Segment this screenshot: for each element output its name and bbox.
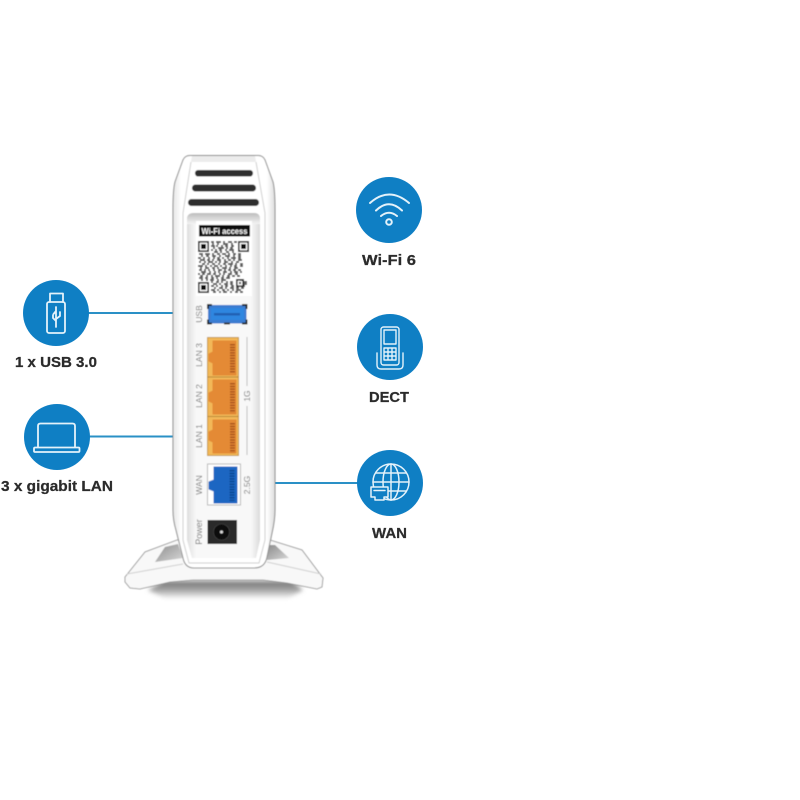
panel top shading [187, 213, 260, 224]
WAN port [208, 464, 240, 505]
LAN 1 jack [209, 420, 236, 453]
stand base [125, 540, 323, 589]
connector line: LAN [89, 436, 173, 438]
white sticker [196, 221, 252, 296]
connector line: USB [88, 312, 173, 314]
USB label: 1 x USB 3.0 [15, 355, 97, 371]
stand slot right [267, 545, 289, 560]
icon: USB stick [47, 294, 65, 333]
body inner edge [183, 162, 265, 563]
icon: wifi [370, 194, 409, 225]
top strip [191, 156, 256, 162]
DECT circle [357, 314, 423, 380]
WAN circle [357, 450, 423, 516]
USB port label: USB [194, 305, 204, 323]
LAN 3 jack [209, 341, 236, 375]
feature: DECT [357, 314, 423, 406]
icon: cordless phone [377, 327, 403, 369]
USB port [208, 305, 246, 324]
USB circle [23, 280, 89, 346]
LAN circle [24, 404, 90, 470]
router device [125, 156, 323, 598]
QR code [198, 241, 249, 293]
Wi-Fi access label: Wi-Fi access [202, 227, 248, 236]
feature: LAN [1, 404, 113, 495]
feature: USB [15, 280, 97, 371]
power socket [208, 520, 237, 544]
1G bracket: 1G [242, 390, 252, 402]
LAN 3 label: LAN 3 [194, 343, 204, 367]
power label: Power [194, 519, 204, 545]
stand front face edge [127, 562, 321, 574]
LAN label: 3 x gigabit LAN [1, 479, 113, 495]
LAN ports [208, 338, 238, 456]
LAN 2 jack [209, 380, 236, 414]
1G bracket [242, 337, 252, 455]
icon: laptop [34, 424, 80, 452]
WAN port label: WAN [194, 475, 204, 495]
vent slots [188, 170, 259, 206]
LAN 2 label: LAN 2 [194, 384, 204, 408]
feature: WAN [357, 450, 423, 542]
DECT label: DECT [369, 390, 409, 406]
WAN label: WAN [372, 526, 407, 542]
connector line: WAN [275, 482, 358, 484]
Wi-Fi circle [356, 177, 422, 243]
Wi-Fi label: Wi-Fi 6 [362, 253, 416, 269]
stand slot left [155, 544, 183, 562]
router body [173, 156, 275, 568]
base shadow [148, 581, 303, 598]
LAN 1 label: LAN 1 [194, 424, 204, 448]
icon: globe with socket [371, 464, 409, 500]
2.5G label: 2.5G [242, 476, 252, 494]
feature: Wi-Fi 6 [356, 177, 422, 269]
rear recessed panel [187, 213, 260, 558]
